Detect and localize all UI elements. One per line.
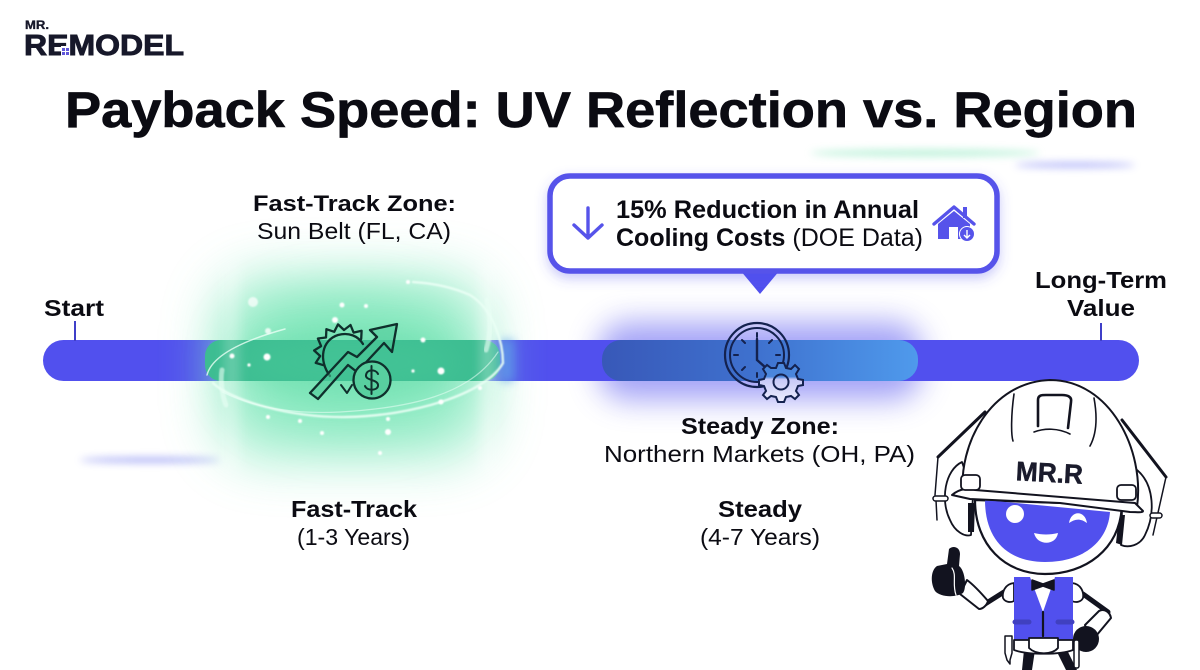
label: steady zone: Steady Zone: xyxy=(681,413,839,439)
callout xyxy=(550,176,997,294)
callout text: 15% Reduction in Annual xyxy=(616,196,919,224)
timeline bar xyxy=(43,340,1139,381)
mascot tool belt xyxy=(1005,636,1079,668)
mascot left arm and thumbs-up hand xyxy=(932,547,1004,609)
mascot face screen xyxy=(985,500,1110,562)
start tick xyxy=(74,321,76,341)
long-term tick xyxy=(1100,323,1102,341)
background glow streaks xyxy=(80,150,1135,462)
icon: down arrow xyxy=(574,208,602,238)
logo: Mr. Remodel: REMODEL xyxy=(24,30,184,62)
label: fast-track zone: Fast-Track Zone: xyxy=(253,191,456,216)
steady zone segment xyxy=(602,340,918,381)
helmet text: MR.R xyxy=(1015,456,1084,490)
sparkles xyxy=(230,280,482,455)
label: long-term value: Value xyxy=(1067,295,1135,321)
mascot head xyxy=(975,500,1122,574)
icon: clock with gear xyxy=(725,323,803,402)
label: steady payback: Steady xyxy=(718,496,802,522)
mascot right arm xyxy=(1073,594,1111,652)
label: fast-track payback: (1-3 Years) xyxy=(297,524,410,550)
mascot vest xyxy=(1014,577,1073,640)
light rings xyxy=(207,282,503,417)
mascot shoulders xyxy=(1003,583,1083,602)
logo: Mr. Remodel: MR. xyxy=(25,20,49,32)
label: fast-track zone xyxy=(253,191,456,244)
label: steady payback: (4-7 Years) xyxy=(700,524,820,550)
mascot ear muffs xyxy=(933,462,1162,546)
fast-track green glow xyxy=(205,262,514,472)
callout pointer xyxy=(740,270,780,294)
label: steady zone xyxy=(604,413,915,467)
mascot head straps xyxy=(935,412,1166,535)
mascot helmet xyxy=(952,380,1143,512)
label: fast-track payback xyxy=(291,496,417,550)
title: Payback Speed: UV Reflection vs. Region xyxy=(65,82,1137,138)
callout text: Cooling Costs (DOE Data) xyxy=(616,224,923,252)
mascot legs xyxy=(1022,650,1077,670)
callout text xyxy=(616,196,923,252)
icon: house with down badge xyxy=(934,207,974,242)
logo: Mr. Remodel xyxy=(24,20,184,62)
mascot: Mr. R robot xyxy=(932,380,1166,670)
label: fast-track zone: Sun Belt (FL, CA) xyxy=(257,218,451,244)
label: fast-track payback: Fast-Track xyxy=(291,496,417,522)
label: long-term value: Long-Term xyxy=(1035,267,1167,293)
label: long-term value xyxy=(1035,267,1167,321)
icon: sun, rising arrow and dollar coin xyxy=(310,324,397,399)
steady zone glow xyxy=(598,322,922,400)
label: steady payback xyxy=(700,496,820,550)
label: start: Start xyxy=(44,295,104,321)
label: steady zone: Northern Markets (OH, PA) xyxy=(604,441,915,467)
